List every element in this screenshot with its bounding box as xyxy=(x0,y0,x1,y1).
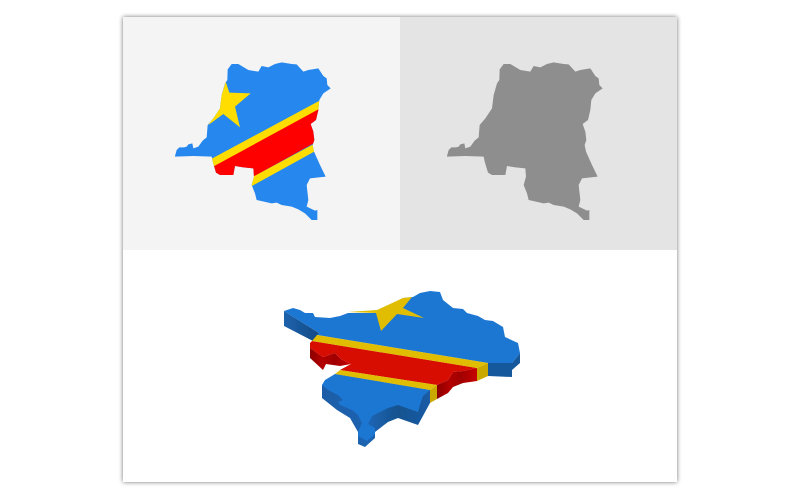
flat flag map xyxy=(175,62,330,220)
infographic canvas xyxy=(120,14,680,486)
3D extruded flag map xyxy=(284,291,520,447)
panel shadow xyxy=(123,17,677,482)
panel: grey silhouette background xyxy=(400,17,677,250)
top surface xyxy=(284,291,520,441)
grey silhouette map xyxy=(447,62,603,220)
white card xyxy=(123,17,677,482)
extruded sides xyxy=(284,311,520,447)
panel: light flag map background xyxy=(123,17,400,250)
